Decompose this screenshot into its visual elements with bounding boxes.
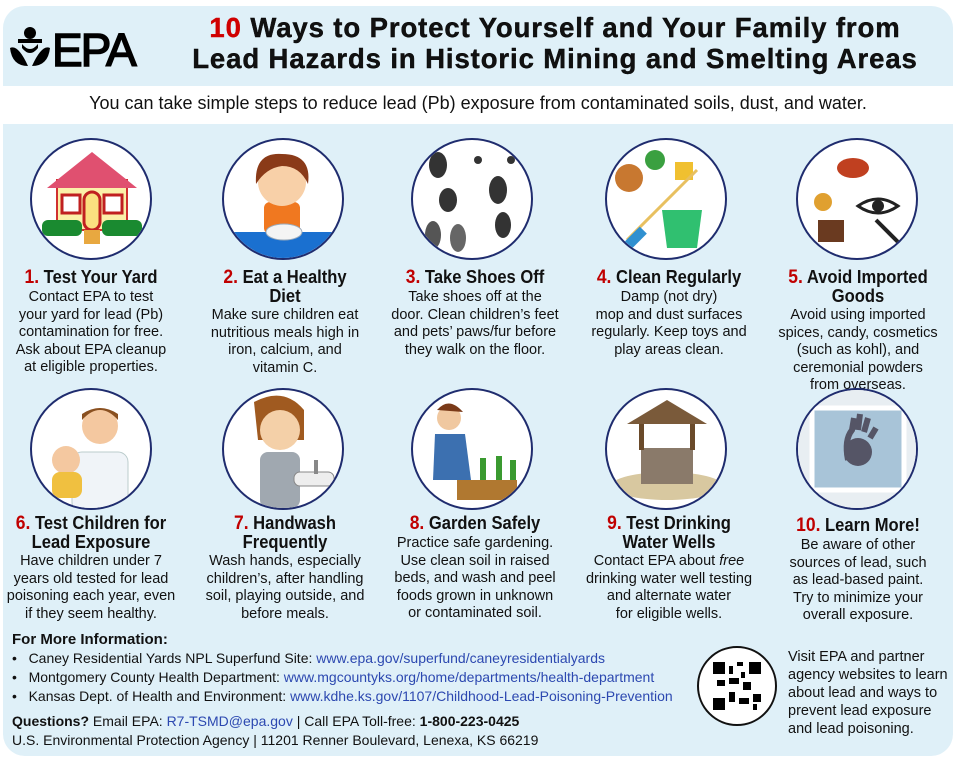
step 1 text: 1. Test Your Yard (24, 267, 157, 288)
footer: more information: Questions? Email EPA: R7-TSMD@epa.gov | Call EPA Toll-free: 1-800-223-0425 (12, 713, 519, 729)
title (192, 12, 918, 74)
step 6 text: if they seem healthy. (25, 606, 157, 622)
icon: doctor (30, 388, 152, 510)
step 9 text: and alternate water (607, 588, 731, 604)
step 10 text: 10. Learn More! (796, 515, 920, 536)
step 10 text: sources of lead, such (789, 554, 927, 570)
step 1 text: at eligible properties. (24, 359, 158, 375)
step 5 text: from overseas. (810, 377, 906, 393)
step 5 text: Goods (832, 286, 884, 306)
step 3 text: door. Clean children’s feet (391, 306, 559, 322)
footer: more information: For More Information: (12, 631, 168, 648)
title: 10 Ways to Protect Yourself and Your Family from (209, 12, 901, 43)
step 10 text: as lead-based paint. (793, 572, 923, 588)
step 6 text: Have children under 7 (20, 553, 162, 569)
step 3 text: and pets’ paws/fur before (394, 324, 556, 340)
icon: handprint window (796, 388, 918, 510)
icon: well (605, 388, 727, 510)
QR code (697, 646, 777, 726)
footer: more information: • Caney Residential Yards NPL Superfund Site: www.epa.gov/superfund/caneyresidentialyards (12, 650, 605, 666)
step 8 text (394, 513, 556, 621)
step 2 text: Diet (269, 286, 301, 306)
step 4 text: regularly. Keep toys and (591, 324, 747, 340)
step 7 text: 7. Handwash (234, 513, 336, 534)
step 9 text (586, 513, 752, 622)
subtitle: You can take simple steps to reduce lead (Pb) exposure from contaminated soils, dust, and water. (89, 93, 867, 113)
icon: gardening (411, 388, 533, 510)
title: Lead Hazards in Historic Mining and Smelting Areas (192, 43, 918, 74)
step 1 text: Contact EPA to test (29, 289, 153, 305)
step 10 text: Try to minimize your (793, 590, 923, 606)
step 1 text: your yard for lead (Pb) (19, 306, 163, 322)
step 6 text (7, 513, 175, 622)
step 9 text: for eligible wells. (616, 606, 722, 622)
EPA logo (10, 24, 138, 70)
step 5 text: spices, candy, cosmetics (778, 324, 938, 340)
header panel (3, 6, 953, 86)
step 5 text: (such as kohl), and (797, 342, 919, 358)
step 8 text: Use clean soil in raised (400, 552, 550, 568)
step 7 text: before meals. (241, 606, 329, 622)
footer: more information: • Kansas Dept. of Health and Environment: www.kdhe.ks.gov/1107/Childhood-Lead-Poisoning-Prevention (12, 688, 673, 704)
footer: more information: • Montgomery County Health Department: www.mgcountyks.org/home/departments/health-department (12, 669, 654, 685)
icon: cleaning (605, 138, 727, 260)
step 1 text: contamination for free. (19, 324, 163, 340)
step 1 text (16, 267, 166, 375)
step 5 text (778, 267, 938, 393)
icon: house (30, 138, 152, 260)
step 6 text: Lead Exposure (32, 532, 150, 552)
step 10 text: overall exposure. (803, 607, 913, 623)
footer: more information (12, 631, 673, 748)
step 8 text: beds, and wash and peel (394, 570, 556, 586)
step 9 text: Contact EPA about free (594, 553, 744, 569)
step 10 text (789, 515, 927, 623)
step 8 text: or contaminated soil. (408, 605, 542, 621)
step 7 text: children’s, after handling (207, 570, 363, 586)
step 4 text: mop and dust surfaces (596, 306, 742, 322)
step 6 text: 6. Test Children for (16, 513, 166, 534)
step 4 text: Damp (not dry) (621, 289, 717, 305)
step 7 text: Frequently (243, 532, 327, 552)
step 5 text: 5. Avoid Imported (788, 267, 928, 288)
step 7 text (206, 513, 364, 622)
step 3 text: they walk on the floor. (405, 342, 545, 358)
step 3 text (391, 267, 559, 358)
step 2 text: 2. Eat a Healthy (223, 267, 347, 288)
step 5 text: ceremonial powders (793, 360, 923, 376)
step 3 text: 3. Take Shoes Off (406, 267, 544, 288)
step 4 text (591, 267, 747, 358)
footer: more information: U.S. Environmental Protection Agency | 11201 Renner Boulevard, Lenexa, KS 66219 (12, 732, 538, 748)
step 9 text: drinking water well testing (586, 570, 752, 586)
icon: handwash (222, 388, 344, 510)
icon: imported goods (796, 138, 918, 260)
step 9 text: Water Wells (623, 532, 715, 552)
step 2 text (211, 267, 359, 376)
step 10 text: Be aware of other (801, 537, 915, 553)
step 8 text: Practice safe gardening. (397, 535, 553, 551)
step 4 text: 4. Clean Regularly (597, 267, 741, 288)
step 1 text: Ask about EPA cleanup (16, 342, 166, 358)
step 3 text: Take shoes off at the (408, 289, 542, 305)
icon: girl eating (222, 138, 344, 260)
QR caption: Visit EPA and partner agency websites to learn about lead and ways to prevent lead exposure and lead poisoning. (788, 649, 948, 737)
step 4 text: play areas clean. (614, 342, 724, 358)
icon: footprints (411, 138, 533, 260)
step 5 text: Avoid using imported (790, 307, 926, 323)
step 8 text: 8. Garden Safely (410, 513, 540, 534)
step 6 text: poisoning each year, even (7, 588, 175, 604)
step 2 text: nutritious meals high in (211, 324, 359, 340)
step 2 text: iron, calcium, and (228, 342, 342, 358)
step 2 text: vitamin C. (253, 360, 317, 376)
step 8 text: foods grown in unknown (397, 588, 553, 604)
step 7 text: Wash hands, especially (209, 553, 361, 569)
step 7 text: soil, playing outside, and (206, 588, 364, 604)
step 9 text: 9. Test Drinking (607, 513, 731, 534)
step 6 text: years old tested for lead (14, 570, 168, 586)
step 2 text: Make sure children eat (212, 307, 358, 323)
